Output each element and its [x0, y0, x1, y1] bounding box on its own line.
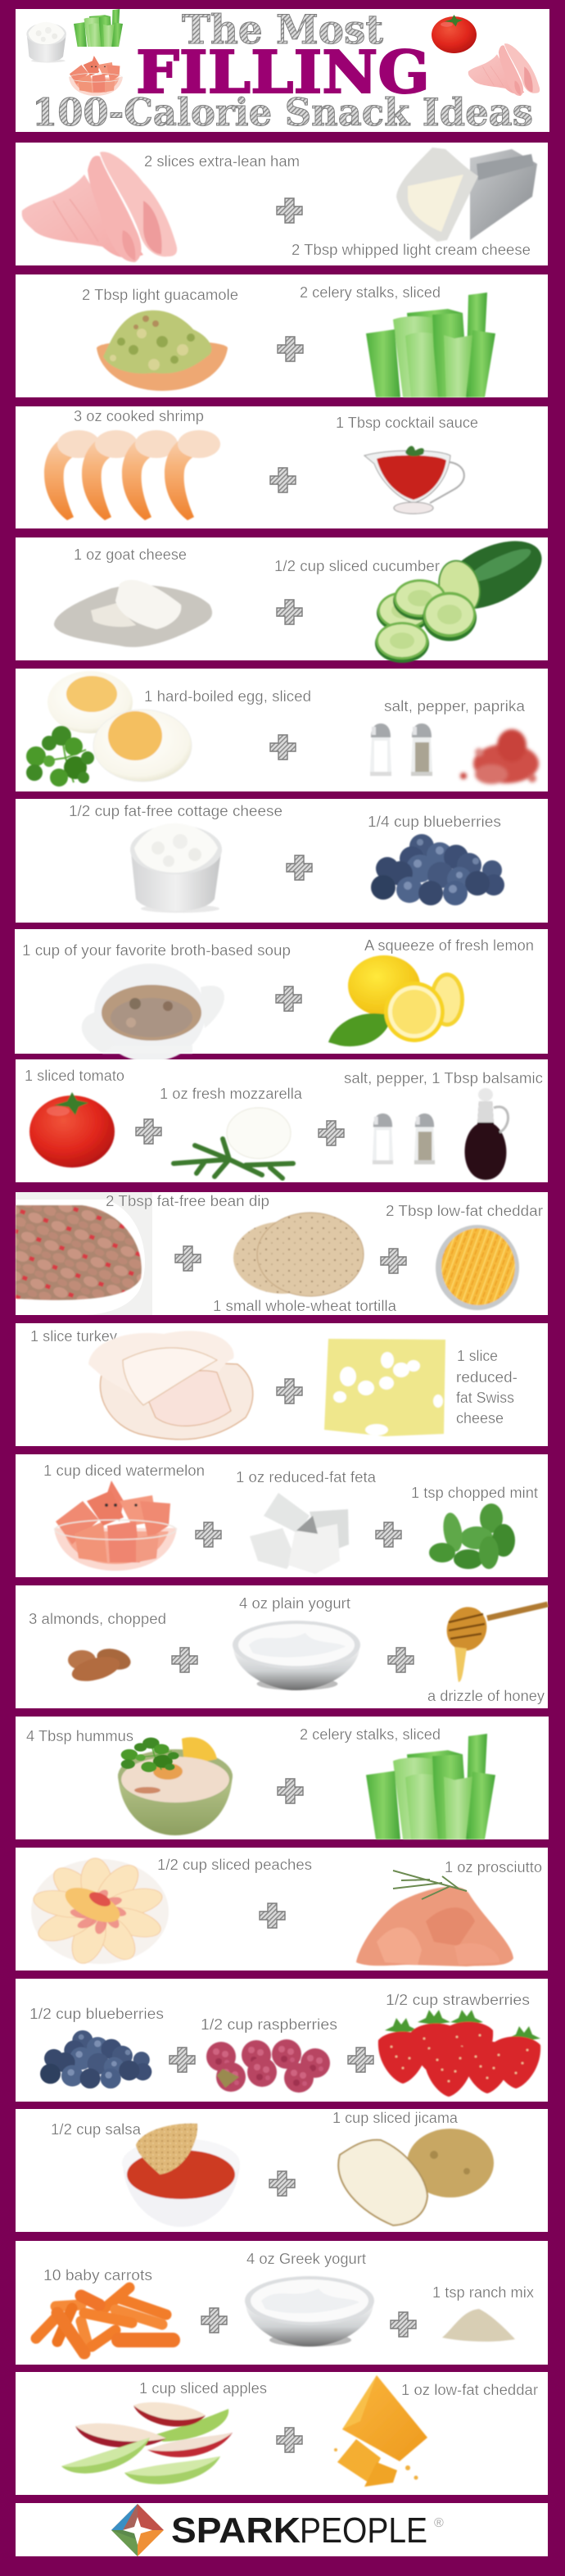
label: 1 oz prosciutto — [445, 1859, 542, 1875]
feta — [250, 1493, 349, 1574]
plus — [175, 1246, 201, 1271]
label: 1 hard-boiled egg, sliced — [144, 688, 311, 705]
pepper shaker — [411, 723, 432, 776]
title line: FILLING: FILLING — [136, 38, 430, 107]
panel: tomato, mozzarella, balsamic — [16, 1059, 548, 1182]
label: 4 Tbsp hummus — [26, 1728, 133, 1744]
mint — [429, 1503, 515, 1569]
label: 1 cup of your favorite broth-based soup — [22, 942, 291, 959]
goat cheese on plate — [54, 580, 212, 647]
label: 2 Tbsp low-fat cheddar — [386, 1203, 543, 1219]
panel: cottage cheese and blueberries — [16, 799, 548, 923]
plus — [260, 1903, 285, 1928]
plus — [170, 2048, 195, 2072]
panel: almonds, yogurt, honey — [16, 1585, 548, 1708]
label: 1 oz fresh mozzarella — [160, 1086, 303, 1102]
label: 2 Tbsp light guacamole — [82, 287, 238, 303]
panel: salsa and jicama — [16, 2109, 548, 2232]
label: 1/2 cup raspberries — [201, 2016, 337, 2033]
cream cheese — [396, 147, 537, 242]
label: 1 cup sliced jicama — [332, 2110, 459, 2126]
tomato — [29, 1092, 115, 1168]
label: 2 Tbsp fat-free bean dip — [106, 1193, 269, 1209]
boiled eggs — [47, 671, 192, 782]
panel: hummus and celery — [16, 1717, 549, 1839]
paprika — [460, 729, 539, 784]
Greek yogurt — [245, 2276, 374, 2347]
plus — [278, 337, 303, 361]
Swiss cheese — [324, 1339, 445, 1436]
label: 3 almonds, chopped — [29, 1611, 166, 1627]
plus — [277, 1379, 302, 1404]
jicama — [338, 2129, 494, 2225]
label: 1/2 cup salsa — [51, 2121, 142, 2138]
label: 1 tsp ranch mix — [432, 2284, 534, 2301]
plus — [270, 735, 296, 760]
panel: three berries — [16, 1979, 548, 2102]
label: 1/2 cup fat-free cottage cheese — [69, 803, 282, 819]
label: 1/2 cup strawberries — [386, 1992, 530, 2008]
label: 1 Tbsp cocktail sauce — [336, 415, 478, 431]
tortilla — [233, 1213, 364, 1296]
salt shaker — [373, 1113, 393, 1164]
label: A squeeze of fresh lemon — [364, 937, 534, 954]
label: 1 sliced tomato — [25, 1068, 124, 1084]
prosciutto — [356, 1887, 513, 1966]
label: 1/2 cup sliced peaches — [157, 1857, 312, 1873]
almonds — [68, 1645, 133, 1685]
panel: watermelon, feta, mint — [16, 1454, 548, 1577]
label: 2 Tbsp whipped light cream cheese — [292, 242, 531, 258]
plus — [381, 1249, 406, 1273]
balsamic bottle — [464, 1088, 508, 1180]
label: 1/2 cup sliced cucumber — [274, 558, 440, 574]
label: 1 oz goat cheese — [74, 546, 187, 563]
celery — [366, 1734, 495, 1839]
parsley — [26, 726, 94, 787]
panel: turkey and Swiss — [16, 1323, 548, 1446]
panel: apples and cheddar — [16, 2372, 548, 2495]
footer panel: SparkPeople logo — [16, 2503, 548, 2556]
label: 1 tsp chopped mint — [411, 1485, 538, 1501]
carrots — [36, 2288, 173, 2353]
label: 2 celery stalks, sliced — [300, 1726, 441, 1743]
icon: tomato — [432, 15, 477, 53]
plus — [391, 2312, 416, 2337]
peaches — [30, 1857, 169, 1966]
arugula — [174, 1139, 293, 1178]
plus — [277, 2428, 302, 2452]
plus — [269, 2171, 295, 2196]
hummus bowl — [118, 1737, 233, 1835]
ham — [22, 152, 177, 262]
title panel — [16, 6, 549, 134]
label: a drizzle of honey — [427, 1688, 545, 1704]
shrimp — [44, 430, 220, 520]
label: reduced- — [456, 1369, 518, 1386]
wordmark — [171, 2510, 427, 2551]
plus — [388, 1648, 414, 1672]
label: 1 cup diced watermelon — [43, 1463, 205, 1479]
label: 1 cup sliced apples — [139, 2380, 267, 2397]
cottage cheese — [130, 823, 222, 913]
panel: egg and spices — [16, 669, 548, 791]
icon: cottage cheese — [26, 22, 66, 62]
panel: shrimp and cocktail sauce — [16, 406, 548, 528]
icon: ham — [468, 43, 540, 96]
title line: 100-Calorie Snack Ideas: 100-Calorie Snack Ideas — [32, 90, 533, 134]
panel: ham and cream cheese — [16, 143, 548, 265]
shredded cheddar — [436, 1225, 519, 1310]
label: cheese — [456, 1410, 504, 1426]
icon: celery — [74, 9, 123, 47]
panel: peaches and prosciutto — [16, 1848, 548, 1971]
label: 1 slice — [457, 1348, 498, 1364]
plus — [278, 1779, 303, 1803]
label: 1 slice turkey — [30, 1328, 117, 1345]
label: 3 oz cooked shrimp — [74, 408, 204, 424]
label: 1/4 cup blueberries — [368, 814, 501, 830]
plus — [348, 2048, 373, 2072]
label: 4 oz plain yogurt — [239, 1595, 350, 1612]
panel: bean dip, tortilla, cheddar — [16, 1192, 548, 1315]
lemons — [328, 955, 464, 1046]
panel: carrots, Greek yogurt, ranch — [16, 2241, 548, 2365]
cheddar — [334, 2375, 427, 2487]
ranch mix — [442, 2309, 515, 2342]
label: 1 oz low-fat cheddar — [401, 2382, 538, 2398]
guacamole — [97, 311, 228, 391]
plus — [277, 600, 302, 624]
label: fat Swiss — [456, 1390, 514, 1406]
title line: The Most: The Most — [182, 6, 383, 53]
panel: soup and lemon — [15, 929, 548, 1062]
plus — [276, 986, 301, 1011]
plus — [136, 1119, 161, 1144]
plus — [201, 2308, 227, 2333]
plus — [172, 1648, 197, 1672]
cucumber — [375, 527, 552, 663]
turkey — [88, 1331, 253, 1440]
plus — [376, 1522, 401, 1547]
bean dip — [16, 1192, 152, 1315]
label: 1/2 cup blueberries — [29, 2006, 164, 2022]
apple slices — [61, 2402, 233, 2484]
icon: watermelon — [69, 56, 123, 96]
blueberries — [371, 834, 504, 905]
plus — [196, 1522, 221, 1547]
plus — [270, 468, 296, 492]
watermelon bowl — [54, 1481, 177, 1571]
celery — [366, 293, 495, 397]
cocktail sauce — [364, 446, 464, 514]
plus — [277, 198, 302, 223]
label: salt, pepper, 1 Tbsp balsamic — [344, 1070, 543, 1086]
panel: goat cheese and cucumber — [16, 527, 552, 663]
pepper shaker — [414, 1113, 435, 1164]
label: 2 celery stalks, sliced — [300, 284, 441, 301]
salsa bowl with chip — [122, 2124, 240, 2227]
label: 2 slices extra-lean ham — [144, 153, 300, 170]
label: 10 baby carrots — [43, 2267, 152, 2283]
label: 4 oz Greek yogurt — [246, 2251, 366, 2267]
raspberries — [206, 2039, 330, 2093]
registered mark: ® — [434, 2516, 444, 2530]
wordmark: SPARK — [171, 2510, 301, 2551]
mozzarella — [227, 1108, 291, 1159]
salt shaker — [370, 723, 391, 776]
panel: guacamole and celery — [16, 274, 548, 397]
label — [456, 1348, 518, 1426]
blueberries — [40, 2030, 151, 2088]
rosemary — [393, 1871, 467, 1899]
honey dipper — [441, 1601, 548, 1682]
yogurt — [233, 1621, 360, 1690]
label: 1 oz reduced-fat feta — [236, 1469, 377, 1485]
plus — [287, 855, 312, 880]
wordmark: PEOPLE — [300, 2510, 427, 2551]
label: salt, pepper, paprika — [384, 698, 526, 714]
label: 1 small whole-wheat tortilla — [213, 1298, 397, 1314]
strawberries — [378, 2010, 540, 2097]
logo mark — [111, 2504, 164, 2556]
parsley garnish — [121, 1738, 179, 1772]
soup bowl — [82, 964, 224, 1062]
plus — [319, 1121, 344, 1145]
